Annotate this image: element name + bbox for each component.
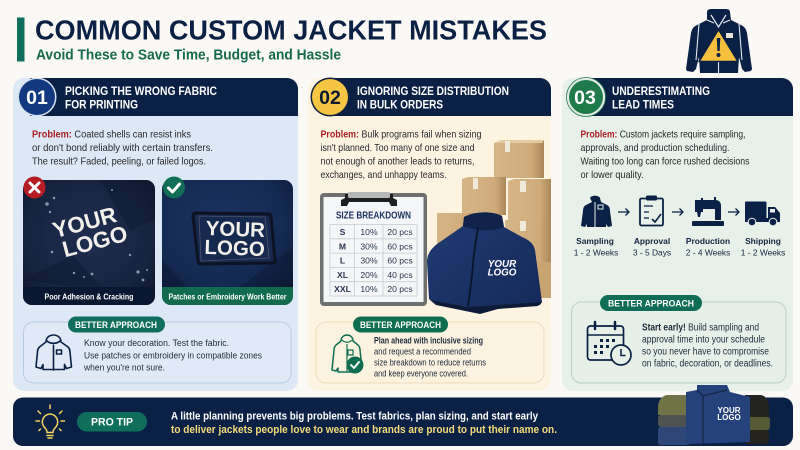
icon: jacket with warning triangle xyxy=(686,9,752,73)
step labels: Sampling xyxy=(576,236,614,246)
problem text: approvals, and production scheduling. xyxy=(580,143,730,154)
icon: sampling jacket xyxy=(581,196,612,227)
better approach text: and keep everyone covered. xyxy=(374,368,468,378)
icon: sewing machine xyxy=(692,197,724,226)
step labels: 2 - 4 Weeks xyxy=(686,248,730,258)
problem text: The result? Faded, peeling, or failed logos. xyxy=(32,156,206,168)
step labels: Production xyxy=(686,236,730,246)
problem text: not enough of another leads to returns, xyxy=(320,156,474,168)
folded navy jacket: YOUR xyxy=(488,259,517,270)
better approach text: size breakdown to reduce returns xyxy=(374,358,487,368)
table rows: 20% xyxy=(360,270,378,280)
photo: embroidered patch: Patches or Embroidery Work Better xyxy=(168,292,287,302)
better approach text: when you're not sure. xyxy=(83,362,165,372)
clipboard: size breakdown table xyxy=(320,192,427,306)
photo: embroidered patch: LOGO xyxy=(204,236,265,261)
table rows: M xyxy=(339,241,346,251)
header text: UNDERESTIMATING xyxy=(612,84,710,98)
process flow xyxy=(574,196,785,258)
table rows: 20 pcs xyxy=(387,227,413,237)
table rows: 20 pcs xyxy=(387,284,413,294)
photo: printed logo cracking: LOGO xyxy=(60,221,130,262)
table rows: XXL xyxy=(334,284,351,294)
panel background xyxy=(308,78,551,391)
pro tip banner xyxy=(13,385,793,446)
better approach pill: BETTER APPROACH xyxy=(608,298,694,310)
photo: embroidered patch xyxy=(162,180,293,305)
panel: fabric mistake xyxy=(13,78,298,391)
panel header xyxy=(30,78,298,116)
photo: printed logo cracking: Poor Adhesion & Cracking xyxy=(44,292,134,302)
problem text: exchanges, and unhappy teams. xyxy=(320,170,446,181)
panel header xyxy=(580,78,793,116)
better approach pill: BETTER APPROACH xyxy=(75,320,157,331)
better approach box xyxy=(24,322,291,383)
panel: size distribution mistake xyxy=(308,78,551,391)
step labels xyxy=(574,236,785,258)
header text: IN BULK ORDERS xyxy=(357,98,443,112)
number badge 01: 01 xyxy=(26,87,48,109)
photo: embroidered patch: YOUR xyxy=(205,217,265,242)
title accent bar xyxy=(17,18,24,62)
icon: green check badge xyxy=(163,176,185,198)
photo: printed logo cracking xyxy=(23,180,155,305)
arrow xyxy=(672,208,683,216)
icon: calendar with clock xyxy=(588,322,631,365)
table rows: 40 pcs xyxy=(387,270,413,280)
table rows xyxy=(334,227,413,294)
pro tip pill: PRO TIP xyxy=(91,416,133,428)
pro tip text: to deliver jackets people love to wear and brands are proud to put their name on. xyxy=(171,424,557,436)
table rows: 10% xyxy=(360,284,378,294)
arrow xyxy=(618,208,629,216)
better approach text: Use patches or embroidery in compatible zones xyxy=(84,350,262,360)
step labels: Shipping xyxy=(745,236,781,246)
icon: delivery truck xyxy=(745,202,780,226)
number badge 01 xyxy=(18,78,56,116)
icon: light bulb xyxy=(36,405,64,438)
problem text: or lower quality. xyxy=(580,170,644,181)
icon: green jacket with check xyxy=(332,335,364,374)
better approach box xyxy=(572,302,786,383)
header text: IGNORING SIZE DISTRIBUTION xyxy=(357,84,509,98)
problem text: Problem: Bulk programs fail when sizing xyxy=(320,130,502,140)
header text: FOR PRINTING xyxy=(65,98,138,112)
folded navy jacket xyxy=(427,212,542,314)
folded jacket stack: YOUR xyxy=(717,406,741,415)
better approach text: and request a recommended xyxy=(374,346,471,356)
table rows: L xyxy=(340,256,345,266)
icon: approval clipboard xyxy=(640,196,663,226)
table rows: 60 pcs xyxy=(387,241,413,251)
better approach text: approval time into your schedule xyxy=(642,334,765,346)
number badge 03 xyxy=(566,78,606,116)
subtitle: Avoid These to Save Time, Budget, and Hassle xyxy=(36,48,341,64)
problem text: Problem: Custom jackets require sampling, xyxy=(580,130,774,140)
panel: lead time mistake xyxy=(562,78,793,391)
table title: SIZE BREAKDOWN xyxy=(336,210,411,222)
number badge 02: 02 xyxy=(319,87,341,109)
better approach text: Know your decoration. Test the fabric. xyxy=(84,337,229,348)
problem text: isn't planned. Too many of one size and xyxy=(320,143,475,154)
step labels: Approval xyxy=(634,236,670,246)
step labels: 1 - 2 Weeks xyxy=(574,248,618,258)
pro tip text: A little planning prevents big problems. Test fabrics, plan sizing, and start early xyxy=(171,410,538,422)
table rows: 30% xyxy=(360,256,378,266)
folded jacket stack: LOGO xyxy=(717,413,741,422)
icon: hooded jacket outline xyxy=(36,335,72,370)
better approach text: Plan ahead with inclusive sizing xyxy=(374,336,483,346)
step labels: 1 - 2 Weeks xyxy=(741,248,785,258)
arrow xyxy=(728,208,739,216)
pro tip pill xyxy=(77,412,147,432)
title: COMMON CUSTOM JACKET MISTAKES xyxy=(35,14,547,46)
better approach text: Start early! Build sampling and xyxy=(642,322,771,334)
table rows: 60 pcs xyxy=(387,256,413,266)
table rows: S xyxy=(340,227,346,237)
table rows: 10% xyxy=(360,227,378,237)
panel background xyxy=(13,78,298,391)
header text: LEAD TIMES xyxy=(612,98,674,112)
better approach text: so you never have to compromise xyxy=(642,346,769,358)
problem text: or don't bond reliably with certain transfers. xyxy=(32,143,213,154)
problem text: Problem: Coated shells can resist inks xyxy=(32,130,206,140)
better approach pill xyxy=(68,316,165,332)
better approach pill xyxy=(600,295,702,311)
stacked cardboard boxes xyxy=(437,140,551,298)
folded navy jacket: LOGO xyxy=(488,268,517,278)
banner background xyxy=(13,398,793,446)
step labels: 3 - 5 Days xyxy=(633,248,671,258)
problem text: Waiting too long can force rushed decisions xyxy=(580,156,750,168)
panel header xyxy=(325,78,551,116)
number badge 03: 03 xyxy=(574,87,596,109)
header text: PICKING THE WRONG FABRIC xyxy=(65,84,217,98)
table rows: XL xyxy=(337,270,348,280)
number badge 02 xyxy=(310,78,350,116)
folded jacket stack xyxy=(658,385,770,445)
better approach pill xyxy=(353,316,448,332)
icon: red x badge xyxy=(24,176,46,198)
better approach box xyxy=(316,322,544,383)
better approach text: on fabric, decoration, or deadlines. xyxy=(642,358,773,370)
table rows: 30% xyxy=(360,241,378,251)
panel background xyxy=(562,78,793,391)
photo: printed logo cracking: YOUR xyxy=(50,202,119,243)
better approach pill: BETTER APPROACH xyxy=(360,320,441,331)
